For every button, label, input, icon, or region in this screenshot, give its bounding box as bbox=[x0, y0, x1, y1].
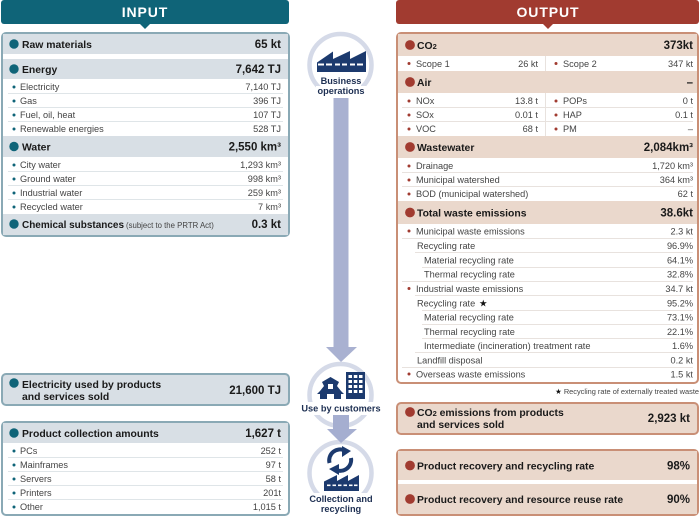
footnote: ★ Recycling rate of externally treated waste bbox=[555, 387, 699, 396]
row: chemical substances: (subject to the PRTR Act) bbox=[126, 221, 214, 230]
row: product collection total: 1,627 t bbox=[245, 428, 281, 440]
ring: business operations bbox=[310, 34, 372, 96]
row: air bbox=[398, 71, 697, 93]
row: raw materials: Raw materials bbox=[22, 40, 92, 51]
icon: recycling arrows bbox=[329, 446, 351, 475]
waste breakdown: Overseas waste emissions bbox=[416, 370, 526, 380]
wastewater breakdown: Municipal watershed bbox=[416, 175, 500, 185]
water breakdown: 259 km³ bbox=[248, 188, 281, 198]
collection breakdown bbox=[8, 446, 283, 512]
panel: CO2 emissions from products: and services sold bbox=[417, 420, 504, 431]
CO2 scopes: Scope 1 bbox=[416, 59, 450, 69]
row: chemical substances: Chemical substances bbox=[22, 220, 124, 231]
collection breakdown: 97 t bbox=[266, 460, 281, 470]
energy breakdown: Electricity bbox=[20, 82, 60, 92]
wastewater breakdown: 364 km³ bbox=[660, 175, 693, 185]
ring: collection and recycling bbox=[310, 442, 372, 504]
label: business operations with factory icon bbox=[316, 51, 366, 98]
air breakdown bbox=[402, 93, 694, 136]
row: energy: Energy bbox=[22, 65, 57, 76]
waste breakdown: 34.7 kt bbox=[665, 284, 693, 294]
waste breakdown: Industrial waste emissions bbox=[416, 284, 524, 294]
energy breakdown bbox=[8, 82, 283, 134]
panel: electricity used by products: and services sold bbox=[22, 392, 109, 403]
row: wastewater: 2,084km³ bbox=[644, 142, 693, 154]
row: air: Air bbox=[417, 78, 431, 89]
label: business operations with factory icon: operations bbox=[318, 86, 364, 96]
row: CO2 bbox=[398, 34, 697, 56]
label: collection and recycling with icon: recycling bbox=[321, 504, 361, 514]
label: business operations with factory icon: Business bbox=[321, 76, 361, 86]
panel: CO2 emissions from products: CO2 emissions from products bbox=[417, 408, 564, 419]
icon: small factory bbox=[324, 475, 359, 491]
row: chemical substances bbox=[3, 214, 288, 235]
row: total waste emissions: Total waste emissions bbox=[417, 208, 527, 220]
air breakdown: 0.01 t bbox=[515, 110, 538, 120]
waste breakdown: 73.1% bbox=[667, 312, 693, 322]
icon: house and office building bbox=[317, 372, 365, 399]
energy breakdown: 7,140 TJ bbox=[245, 82, 281, 92]
ring: use by customers bbox=[310, 364, 372, 426]
energy breakdown: 528 TJ bbox=[253, 124, 281, 134]
label: collection and recycling with icon bbox=[308, 446, 374, 516]
row: total waste emissions: 38.6kt bbox=[660, 208, 693, 220]
panel: product collection amounts bbox=[2, 422, 289, 515]
row: resource reuse rate: Product recovery and resource reuse rate bbox=[417, 495, 623, 506]
air breakdown: HAP bbox=[563, 110, 582, 120]
water breakdown: 7 km³ bbox=[258, 202, 281, 212]
row: raw materials bbox=[3, 34, 288, 54]
water breakdown: Recycled water bbox=[20, 202, 83, 212]
row: wastewater: Wastewater bbox=[417, 143, 474, 154]
collection breakdown: PCs bbox=[20, 446, 38, 456]
panel: electricity used by products bbox=[2, 374, 289, 405]
wastewater breakdown: 1,720 km³ bbox=[652, 161, 693, 171]
collection breakdown: Mainframes bbox=[20, 460, 68, 470]
air breakdown: PM bbox=[563, 124, 577, 134]
panel: output emissions bbox=[397, 33, 698, 383]
waste breakdown: Material recycling rate bbox=[424, 312, 514, 322]
row: product collection total bbox=[3, 423, 288, 443]
wastewater breakdown bbox=[402, 161, 693, 199]
air breakdown: 68 t bbox=[523, 124, 538, 134]
air breakdown: 0.1 t bbox=[675, 110, 693, 120]
waste breakdown: ★ bbox=[479, 298, 488, 310]
collection breakdown: Other bbox=[20, 502, 43, 512]
water breakdown: 1,293 km³ bbox=[240, 160, 281, 170]
air breakdown: – bbox=[688, 124, 694, 134]
collection breakdown: 201t bbox=[263, 488, 281, 498]
wastewater breakdown: BOD (municipal watershed) bbox=[416, 189, 528, 199]
collection breakdown: Printers bbox=[20, 488, 52, 498]
energy breakdown: 396 TJ bbox=[253, 96, 281, 106]
header: INPUT: INPUT bbox=[122, 4, 168, 20]
CO2 scopes bbox=[408, 56, 693, 71]
row: chemical substances: 0.3 kt bbox=[252, 219, 281, 231]
waste breakdown: Municipal waste emissions bbox=[416, 226, 525, 236]
air breakdown: NOx bbox=[416, 96, 435, 106]
CO2 scopes: 26 kt bbox=[518, 59, 538, 69]
energy breakdown: Fuel, oil, heat bbox=[20, 110, 76, 120]
waste breakdown: Landfill disposal bbox=[417, 356, 482, 366]
waste breakdown: 64.1% bbox=[667, 256, 693, 266]
row: resource reuse rate: 90% bbox=[667, 494, 690, 506]
panel: CO2 emissions from products bbox=[397, 403, 698, 434]
water breakdown: 998 km³ bbox=[248, 174, 281, 184]
air breakdown: 13.8 t bbox=[515, 96, 538, 106]
label: use by customers with buildings icon bbox=[300, 372, 382, 415]
row: energy: 7,642 TJ bbox=[236, 64, 281, 76]
collection breakdown: 1,015 t bbox=[253, 502, 281, 512]
waste breakdown: 95.2% bbox=[667, 298, 693, 308]
row: recycling rate: Product recovery and recycling rate bbox=[417, 462, 595, 472]
row: air: – bbox=[687, 77, 694, 89]
air breakdown: VOC bbox=[416, 124, 436, 134]
row: product collection total: Product collection amounts bbox=[22, 429, 159, 440]
panel: CO2 emissions from products: 2,923 kt bbox=[648, 413, 690, 425]
waste breakdown: 96.9% bbox=[667, 241, 693, 251]
energy breakdown: Gas bbox=[20, 96, 37, 106]
row: total waste emissions bbox=[398, 201, 697, 224]
label: collection and recycling with icon: Collection and bbox=[309, 494, 373, 504]
energy breakdown: Renewable energies bbox=[20, 124, 104, 134]
waste breakdown: 1.6% bbox=[672, 341, 693, 351]
water breakdown: City water bbox=[20, 160, 61, 170]
water breakdown: Ground water bbox=[20, 174, 76, 184]
arrow: customers to collection bbox=[327, 415, 357, 443]
row: CO2: 373kt bbox=[664, 40, 693, 52]
panel: electricity used by products: Electricity used by products bbox=[22, 380, 161, 391]
collection breakdown: 252 t bbox=[261, 446, 281, 456]
wastewater breakdown: Drainage bbox=[416, 161, 453, 171]
air breakdown: POPs bbox=[563, 96, 587, 106]
row: energy bbox=[3, 59, 288, 79]
label: use by customers with buildings icon: Use by customers bbox=[301, 404, 381, 414]
row: water bbox=[3, 136, 288, 157]
row: raw materials: 65 kt bbox=[255, 39, 281, 51]
air breakdown: SOx bbox=[416, 110, 434, 120]
waste breakdown: Intermediate (incineration) treatment rate bbox=[424, 341, 590, 351]
waste breakdown: 22.1% bbox=[667, 327, 693, 337]
waste breakdown bbox=[402, 226, 693, 380]
waste breakdown: Thermal recycling rate bbox=[424, 327, 515, 337]
waste breakdown: Thermal recycling rate bbox=[424, 270, 515, 280]
row: water: 2,550 km³ bbox=[229, 142, 281, 154]
waste breakdown: Recycling rate bbox=[417, 241, 475, 251]
row: recycling rate bbox=[398, 451, 697, 480]
row: recycling rate: 98% bbox=[667, 460, 690, 472]
waste breakdown: 2.3 kt bbox=[671, 226, 693, 236]
header: OUTPUT: OUTPUT bbox=[517, 4, 579, 20]
waste breakdown: 1.5 kt bbox=[671, 370, 693, 380]
air breakdown: 0 t bbox=[683, 96, 693, 106]
panel: electricity used by products: 21,600 TJ bbox=[229, 385, 281, 397]
row: resource reuse rate bbox=[398, 484, 697, 514]
panel: input resources bbox=[2, 33, 289, 236]
collection breakdown: 58 t bbox=[266, 474, 281, 484]
energy breakdown: 107 TJ bbox=[253, 110, 281, 120]
waste breakdown: 32.8% bbox=[667, 270, 693, 280]
collection breakdown: Servers bbox=[20, 474, 52, 484]
waste breakdown: Material recycling rate bbox=[424, 256, 514, 266]
icon: factory bbox=[317, 51, 366, 72]
CO2 scopes: Scope 2 bbox=[563, 59, 597, 69]
CO2 scopes: 347 kt bbox=[668, 59, 693, 69]
header: INPUT bbox=[1, 0, 289, 29]
water breakdown: Industrial water bbox=[20, 188, 82, 198]
header: OUTPUT bbox=[396, 0, 699, 29]
row: water: Water bbox=[22, 142, 50, 154]
row: wastewater bbox=[398, 136, 697, 158]
row: CO2: CO2 bbox=[417, 41, 437, 52]
water breakdown bbox=[8, 160, 283, 212]
panel: product recovery bbox=[397, 450, 698, 515]
waste breakdown: Recycling rate bbox=[417, 298, 475, 308]
waste breakdown: 0.2 kt bbox=[671, 356, 693, 366]
wastewater breakdown: 62 t bbox=[678, 189, 693, 199]
arrow: operations to customers bbox=[326, 98, 357, 362]
